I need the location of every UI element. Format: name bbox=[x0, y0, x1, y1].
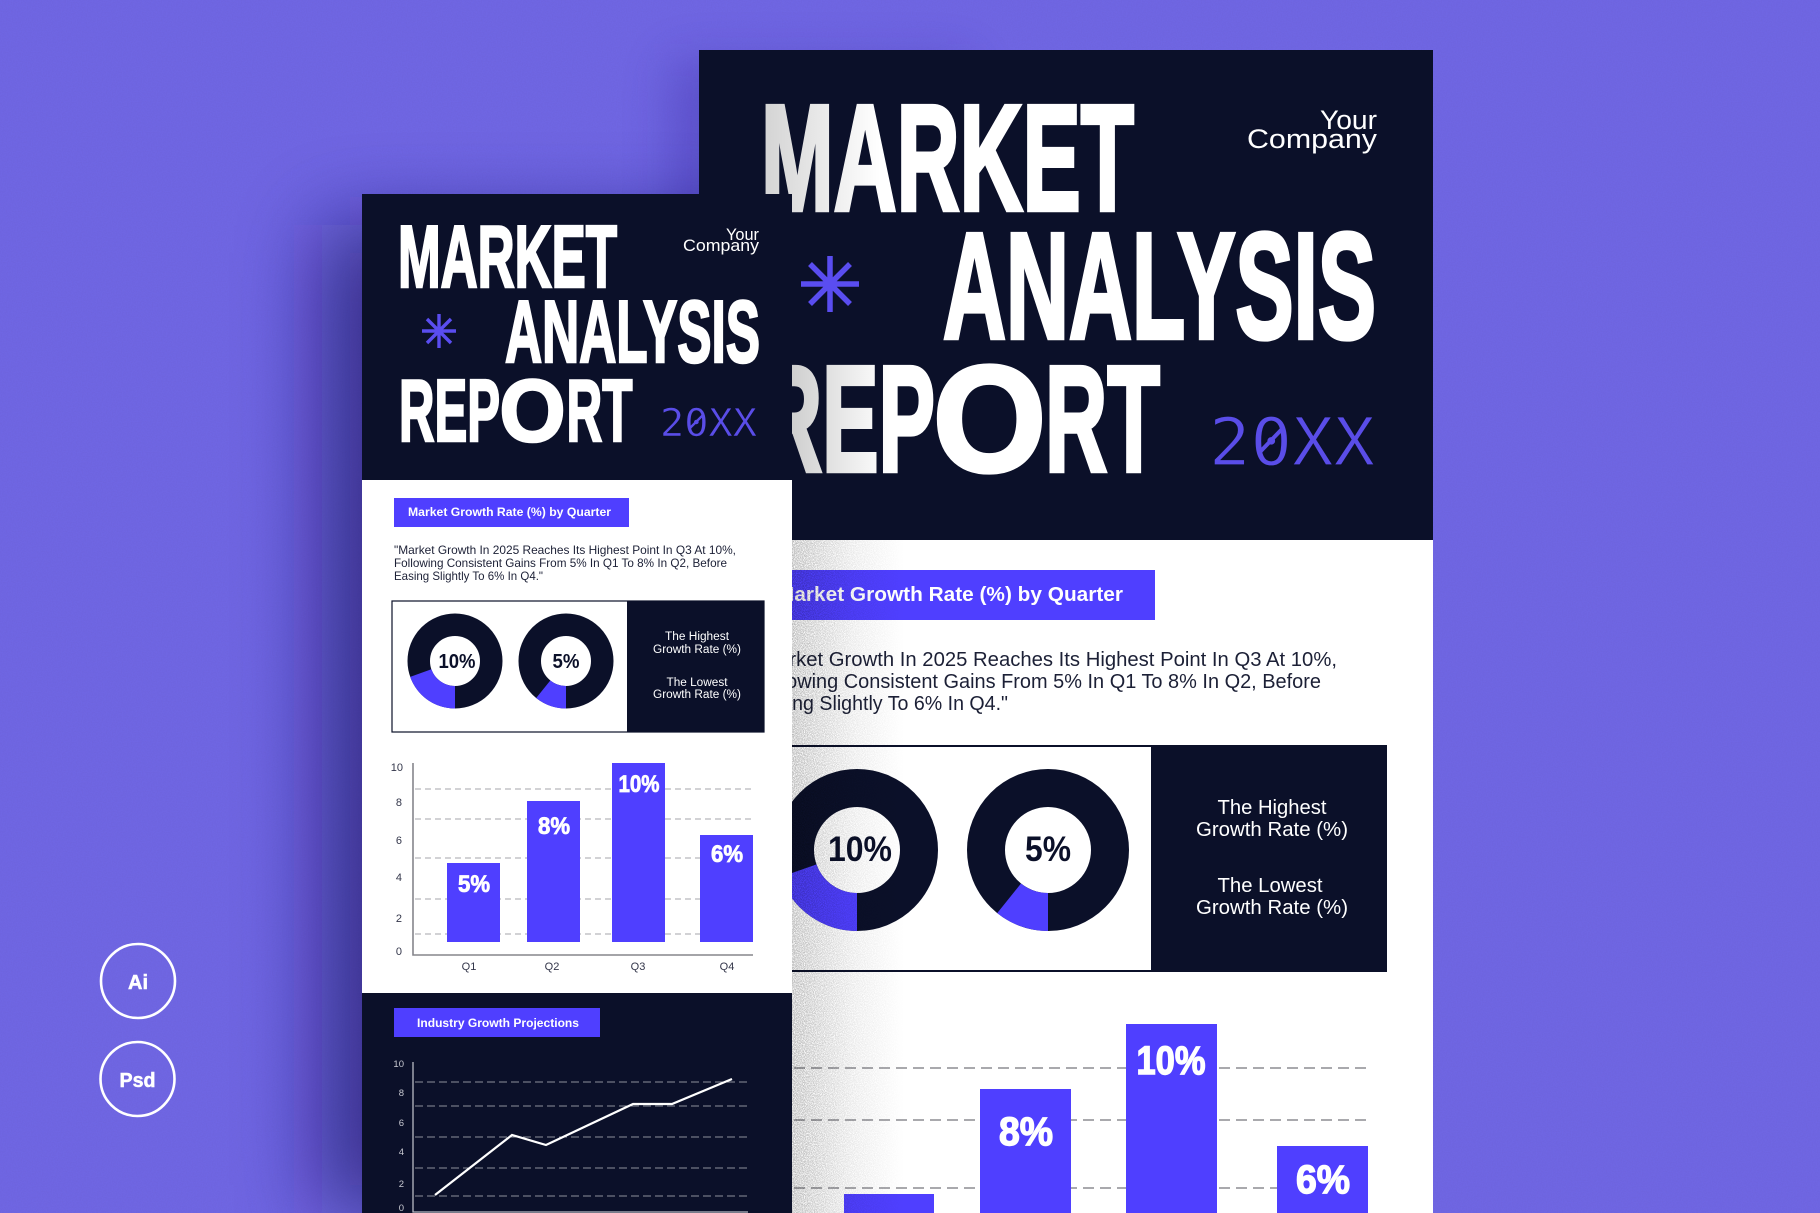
small page dark section bbox=[362, 993, 792, 1213]
small title: MARKET bbox=[398, 207, 617, 306]
small bar chart: 4 bbox=[396, 872, 402, 884]
small title: ANALYSIS bbox=[505, 282, 760, 381]
large company name bbox=[1247, 105, 1378, 154]
small company name bbox=[683, 225, 760, 255]
small donut legend: Growth Rate (%) bbox=[653, 689, 741, 701]
small body text bbox=[394, 543, 736, 583]
large title: RT bbox=[1045, 334, 1160, 503]
badge: Psd format bbox=[100, 1042, 174, 1116]
small bar chart bbox=[391, 762, 753, 973]
small bar chart: 10 bbox=[391, 762, 403, 774]
line chart bbox=[393, 1059, 750, 1213]
large bar chart bbox=[760, 1024, 1368, 1213]
small year: 20XX bbox=[660, 401, 757, 446]
large donut 10% bbox=[781, 788, 919, 931]
projections badge: Industry Growth Projections bbox=[417, 1016, 579, 1030]
small title: O bbox=[500, 361, 566, 460]
small donut legend bbox=[653, 631, 741, 701]
large title bbox=[761, 73, 1376, 503]
small donut 10% bbox=[410, 625, 491, 708]
small donut 10%: 10% bbox=[438, 651, 476, 673]
small bar chart: Q4 bbox=[720, 961, 734, 973]
large bar chart: 10% bbox=[1136, 1039, 1206, 1083]
small donut legend: Growth Rate (%) bbox=[653, 644, 741, 656]
icon: large asterisk bbox=[801, 256, 859, 312]
large bar chart: 6% bbox=[1296, 1158, 1350, 1202]
small body text: Easing Slightly To 6% In Q4." bbox=[394, 569, 543, 583]
icon: small asterisk bbox=[422, 314, 456, 348]
large donut 10%: 10% bbox=[828, 830, 892, 869]
badge: Ai format bbox=[101, 944, 175, 1018]
large bar chart: 8% bbox=[999, 1110, 1053, 1154]
shadow cast on large page bbox=[792, 540, 904, 1213]
large donut legend: The Highest bbox=[1218, 797, 1327, 819]
small title bbox=[398, 207, 760, 460]
small body text: "Market Growth In 2025 Reaches Its Highest Point In Q3 At 10%, bbox=[394, 543, 736, 557]
small bar chart: 0 bbox=[396, 946, 402, 958]
large year: 20XX bbox=[1209, 404, 1375, 481]
large donut box bbox=[751, 746, 1386, 971]
large badge: Market Growth Rate (%) by Quarter bbox=[777, 584, 1123, 606]
large donut legend bbox=[1196, 797, 1348, 919]
small bar chart: 8 bbox=[396, 797, 402, 809]
badge: Psd format: Psd bbox=[120, 1070, 156, 1092]
small company name: Company bbox=[683, 236, 760, 255]
small title: RT bbox=[566, 361, 632, 460]
badge: Ai format: Ai bbox=[128, 972, 148, 994]
small bar chart: 8% bbox=[538, 813, 570, 840]
large body text: Following Consistent Gains From 5% In Q1 To 8% In Q2, Before bbox=[754, 671, 1321, 693]
line chart: 6 bbox=[399, 1118, 404, 1129]
small donut box bbox=[392, 601, 764, 732]
projections badge bbox=[394, 1008, 600, 1037]
small badge: Market Growth Rate (%) by Quarter bbox=[408, 505, 611, 519]
large donut legend: Growth Rate (%) bbox=[1196, 897, 1348, 919]
small page header bbox=[362, 194, 792, 480]
large donut legend: The Lowest bbox=[1218, 875, 1323, 897]
large company name: Company bbox=[1247, 124, 1378, 154]
small bar chart: Q2 bbox=[545, 961, 559, 973]
large badge bbox=[754, 570, 1155, 620]
large title: MARKET bbox=[761, 73, 1134, 242]
large title: ANALYSIS bbox=[943, 201, 1376, 370]
large donut legend: Growth Rate (%) bbox=[1196, 819, 1348, 841]
small bar chart: 6 bbox=[396, 835, 402, 847]
line chart: 8 bbox=[399, 1088, 404, 1099]
large title: REP bbox=[761, 334, 935, 503]
small badge bbox=[394, 498, 629, 527]
small bar chart: 5% bbox=[458, 871, 490, 898]
small bar chart: Q3 bbox=[631, 961, 645, 973]
large page white body bbox=[699, 540, 1433, 1213]
panel: large report page bbox=[699, 50, 1433, 1213]
large company name: Your bbox=[1320, 105, 1377, 135]
large page header bbox=[699, 50, 1433, 540]
line chart: 2 bbox=[399, 1179, 404, 1190]
small bar chart: 2 bbox=[396, 913, 402, 925]
large donut 5% bbox=[986, 788, 1110, 931]
line chart: 10 bbox=[393, 1059, 404, 1070]
small bar chart: Q1 bbox=[462, 961, 476, 973]
small body text: Following Consistent Gains From 5% In Q1 To 8% In Q2, Before bbox=[394, 556, 727, 570]
small donut legend: The Highest bbox=[665, 631, 730, 643]
large donut 5%: 5% bbox=[1025, 830, 1071, 869]
large body text: "Market Growth In 2025 Reaches Its Highest Point In Q3 At 10%, bbox=[754, 649, 1337, 671]
small donut 5%: 5% bbox=[552, 651, 580, 673]
small company name: Your bbox=[726, 225, 759, 244]
panel: small report page bbox=[362, 194, 792, 1213]
large title: O bbox=[933, 334, 1046, 503]
large body text bbox=[754, 649, 1337, 715]
small donut legend: The Lowest bbox=[666, 677, 728, 689]
small bar chart: 6% bbox=[711, 841, 743, 868]
small title: REP bbox=[399, 361, 500, 460]
line chart: 4 bbox=[399, 1147, 404, 1158]
small page white body bbox=[362, 480, 792, 993]
small donut 5% bbox=[530, 625, 602, 708]
large body text: Easing Slightly To 6% In Q4." bbox=[754, 693, 1008, 715]
small bar chart: 10% bbox=[618, 771, 660, 798]
